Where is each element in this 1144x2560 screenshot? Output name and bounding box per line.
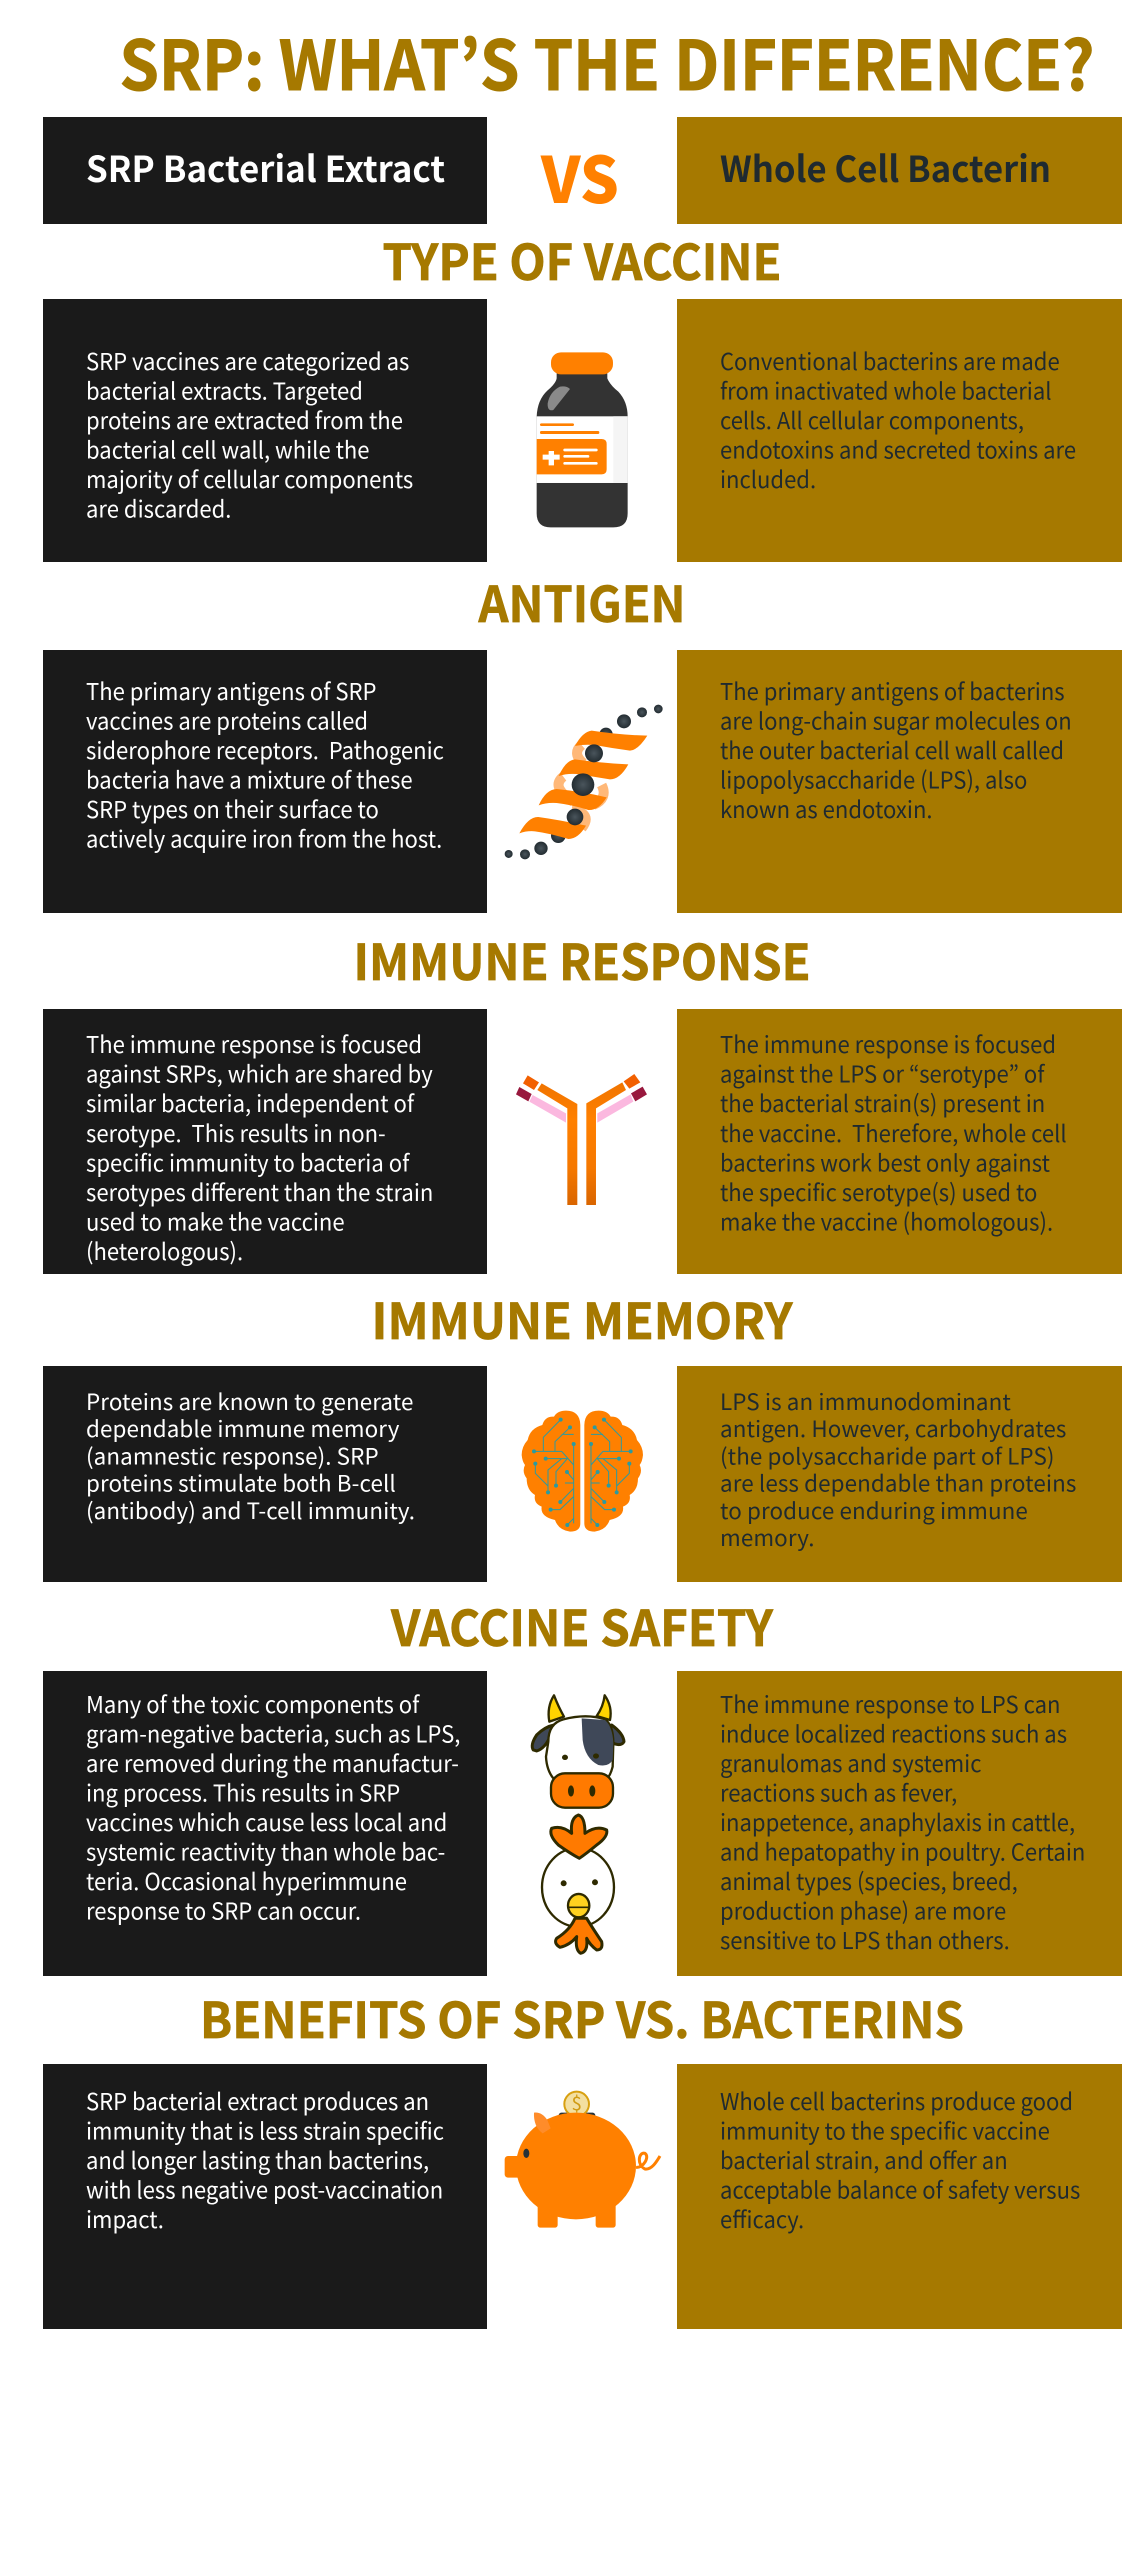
- panel: bacterin antigen: [677, 650, 1122, 913]
- panel: bacterin vaccine safety: reactions such as fever,: [720, 1775, 957, 1809]
- panel: SRP benefits: impact.: [86, 2201, 164, 2235]
- panel: bacterin antigen: The primary antigens of bacterins: [720, 673, 1065, 707]
- panel: SRP vaccine safety: Many of the toxic components of: [86, 1686, 421, 1720]
- panel: SRP immune response: similar bacteria, independent of: [86, 1085, 416, 1119]
- panel: SRP immune response: used to make the vaccine: [86, 1204, 345, 1238]
- heading: immune response: IMMUNE RESPONSE: [354, 924, 810, 995]
- icon: cow and chicken: [532, 1695, 624, 1953]
- panel: SRP benefits: and longer lasting than bacterins,: [86, 2142, 429, 2176]
- panel: bacterin immune response: the vaccine. Therefore, whole cell: [720, 1115, 1067, 1149]
- panel: bacterin vaccine safety: inappetence, anaphylaxis in cattle,: [720, 1804, 1075, 1838]
- panel: SRP benefits: SRP bacterial extract produces an: [86, 2083, 429, 2117]
- panel: SRP immune response: serotypes different than the strain: [86, 1174, 433, 1208]
- title: SRP: WHAT’S THE DIFFERENCE?: [120, 11, 1094, 110]
- panel: Whole Cell Bacterin header: Whole Cell Bacterin: [720, 141, 1051, 193]
- panel: SRP vaccine safety: are removed during the manufactur-: [86, 1745, 459, 1779]
- panel: bacterin vaccine safety: and hepatopathy in poultry. Certain: [720, 1834, 1085, 1868]
- panel: SRP type of vaccine: [43, 299, 487, 562]
- panel: bacterin vaccine safety: [677, 1671, 1122, 1976]
- panel: SRP immune memory: (antibody) and T-cell immunity.: [86, 1494, 415, 1526]
- panel: bacterin type of vaccine: from inactivated whole bacterial: [720, 373, 1052, 407]
- panel: SRP benefits: with less negative post-vaccination: [86, 2172, 443, 2206]
- panel: bacterin immune response: [677, 1009, 1122, 1274]
- icon: cow: [532, 1695, 624, 1808]
- panel: SRP benefits: [43, 2064, 487, 2329]
- panel: SRP immune response: specific immunity to bacteria of: [86, 1145, 411, 1179]
- panel: SRP antigen: siderophore receptors. Pathogenic: [86, 732, 444, 766]
- panel: bacterin antigen: the outer bacterial cell wall called: [720, 732, 1064, 766]
- panel: SRP vaccine safety: teria. Occasional hyperimmune: [86, 1863, 407, 1897]
- panel: SRP immune response: (heterologous).: [86, 1233, 243, 1267]
- panel: SRP immune memory: proteins stimulate both B-cell: [86, 1467, 396, 1499]
- panel: bacterin immune memory: memory.: [720, 1521, 815, 1553]
- panel: bacterin benefits: efficacy.: [720, 2201, 804, 2235]
- panel: bacterin benefits: immunity to the specific vaccine: [720, 2113, 1050, 2147]
- panel: SRP type of vaccine: SRP vaccines are categorized as: [86, 343, 409, 377]
- panel: SRP type of vaccine: bacterial extracts. Targeted: [86, 373, 363, 407]
- heading: immune memory: IMMUNE MEMORY: [372, 1283, 793, 1354]
- panel: SRP type of vaccine: bacterial cell wall, while the: [86, 432, 370, 466]
- panel: SRP benefits: immunity that is less strain specific: [86, 2113, 444, 2147]
- panel: SRP antigen: The primary antigens of SRP: [86, 673, 376, 707]
- panel: SRP antigen: [43, 650, 487, 913]
- panel: bacterin immune response: the specific serotype(s) used to: [720, 1174, 1037, 1208]
- panel: SRP vaccine safety: response to SRP can occur.: [86, 1893, 361, 1927]
- panel: bacterin type of vaccine: [677, 299, 1122, 562]
- icon: piggy bank: [505, 2090, 660, 2228]
- panel: SRP immune response: The immune response is focused: [86, 1026, 422, 1060]
- heading: benefits: BENEFITS OF SRP VS. BACTERINS: [200, 1982, 964, 2053]
- panel: SRP type of vaccine: are discarded.: [86, 491, 231, 525]
- panel: bacterin immune memory: antigen. However, carbohydrates: [720, 1412, 1066, 1444]
- panel: SRP immune memory: Proteins are known to generate: [86, 1385, 413, 1417]
- panel: bacterin immune response: bacterins work best only against: [720, 1145, 1050, 1179]
- panel: bacterin immune memory: are less dependable than proteins: [720, 1467, 1076, 1499]
- panel: bacterin benefits: acceptable balance of safety versus: [720, 2172, 1080, 2206]
- panel: SRP immune memory: dependable immune memory: [86, 1412, 400, 1444]
- icon: brain circuit: [522, 1411, 643, 1532]
- panel: bacterin type of vaccine: Conventional bacterins are made: [720, 343, 1060, 377]
- panel: bacterin immune memory: (the polysaccharide part of LPS): [720, 1439, 1055, 1471]
- heading: type of vaccine: TYPE OF VACCINE: [382, 224, 782, 295]
- panel: bacterin vaccine safety: production phase) are more: [720, 1893, 1006, 1927]
- panel: bacterin immune response: against the LPS or “serotype” of: [720, 1056, 1046, 1090]
- panel: SRP immune memory: (anamnestic response). SRP: [86, 1439, 379, 1471]
- panel: bacterin immune response: the bacterial strain(s) present in: [720, 1085, 1045, 1119]
- panel: bacterin vaccine safety: animal types (species, breed,: [720, 1863, 1018, 1897]
- panel: bacterin immune response: The immune response is focused: [720, 1026, 1056, 1060]
- panel: bacterin vaccine safety: granulomas and systemic: [720, 1745, 982, 1779]
- icon: DNA ribbon: [505, 705, 663, 859]
- panel: SRP type of vaccine: majority of cellular components: [86, 461, 413, 495]
- panel: bacterin antigen: are long-chain sugar molecules on: [720, 703, 1072, 737]
- panel: SRP antigen: actively acquire iron from the host.: [86, 821, 442, 855]
- panel: SRP vaccine safety: vaccines which cause less local and: [86, 1804, 447, 1838]
- heading: antigen: ANTIGEN: [478, 566, 686, 637]
- panel: bacterin type of vaccine: included.: [720, 461, 816, 495]
- panel: SRP immune response: serotype. This results in non-: [86, 1115, 386, 1149]
- panel: bacterin immune memory: to produce enduring immune: [720, 1494, 1028, 1526]
- icon: chicken: [542, 1815, 614, 1953]
- panel: bacterin benefits: bacterial strain, and offer an: [720, 2142, 1008, 2176]
- icon: piggy bank: $: [571, 2090, 582, 2117]
- panel: bacterin immune response: make the vaccine (homologous).: [720, 1204, 1053, 1238]
- panel: bacterin type of vaccine: cells. All cellular components,: [720, 402, 1024, 436]
- panel: bacterin immune memory: LPS is an immunodominant: [720, 1385, 1011, 1417]
- panel: SRP Bacterial Extract header: [43, 117, 487, 224]
- panel: Whole Cell Bacterin header: [677, 117, 1122, 224]
- panel: SRP antigen: bacteria have a mixture of these: [86, 762, 413, 796]
- panel: SRP vaccine safety: ing process. This results in SRP: [86, 1775, 400, 1809]
- panel: bacterin vaccine safety: sensitive to LPS than others.: [720, 1922, 1010, 1956]
- icon: antibody: [516, 1074, 647, 1205]
- panel: SRP type of vaccine: proteins are extracted from the: [86, 402, 403, 436]
- panel: SRP vaccine safety: [43, 1671, 487, 1976]
- panel: bacterin vaccine safety: The immune response to LPS can: [720, 1686, 1060, 1720]
- panel: SRP antigen: SRP types on their surface to: [86, 791, 379, 825]
- panel: SRP Bacterial Extract header: SRP Bacterial Extract: [86, 141, 445, 193]
- panel: bacterin antigen: known as endotoxin.: [720, 791, 933, 825]
- panel: SRP vaccine safety: gram-negative bacteria, such as LPS,: [86, 1716, 460, 1750]
- panel: bacterin antigen: lipopolysaccharide (LPS), also: [720, 762, 1027, 796]
- icon: vaccine bottle: [537, 352, 628, 527]
- panel: bacterin benefits: Whole cell bacterins produce good: [720, 2083, 1073, 2117]
- VS label: VS: [540, 130, 619, 222]
- panel: bacterin immune memory: [677, 1366, 1122, 1582]
- panel: SRP immune response: against SRPs, which are shared by: [86, 1056, 433, 1090]
- panel: SRP immune response: [43, 1009, 487, 1274]
- panel: SRP antigen: vaccines are proteins called: [86, 703, 368, 737]
- panel: bacterin type of vaccine: endotoxins and secreted toxins are: [720, 432, 1076, 466]
- panel: SRP immune memory: [43, 1366, 487, 1582]
- panel: bacterin benefits: [677, 2064, 1122, 2329]
- panel: SRP vaccine safety: systemic reactivity than whole bac-: [86, 1834, 445, 1868]
- heading: vaccine safety: VACCINE SAFETY: [390, 1590, 774, 1661]
- panel: bacterin vaccine safety: induce localized reactions such as: [720, 1716, 1067, 1750]
